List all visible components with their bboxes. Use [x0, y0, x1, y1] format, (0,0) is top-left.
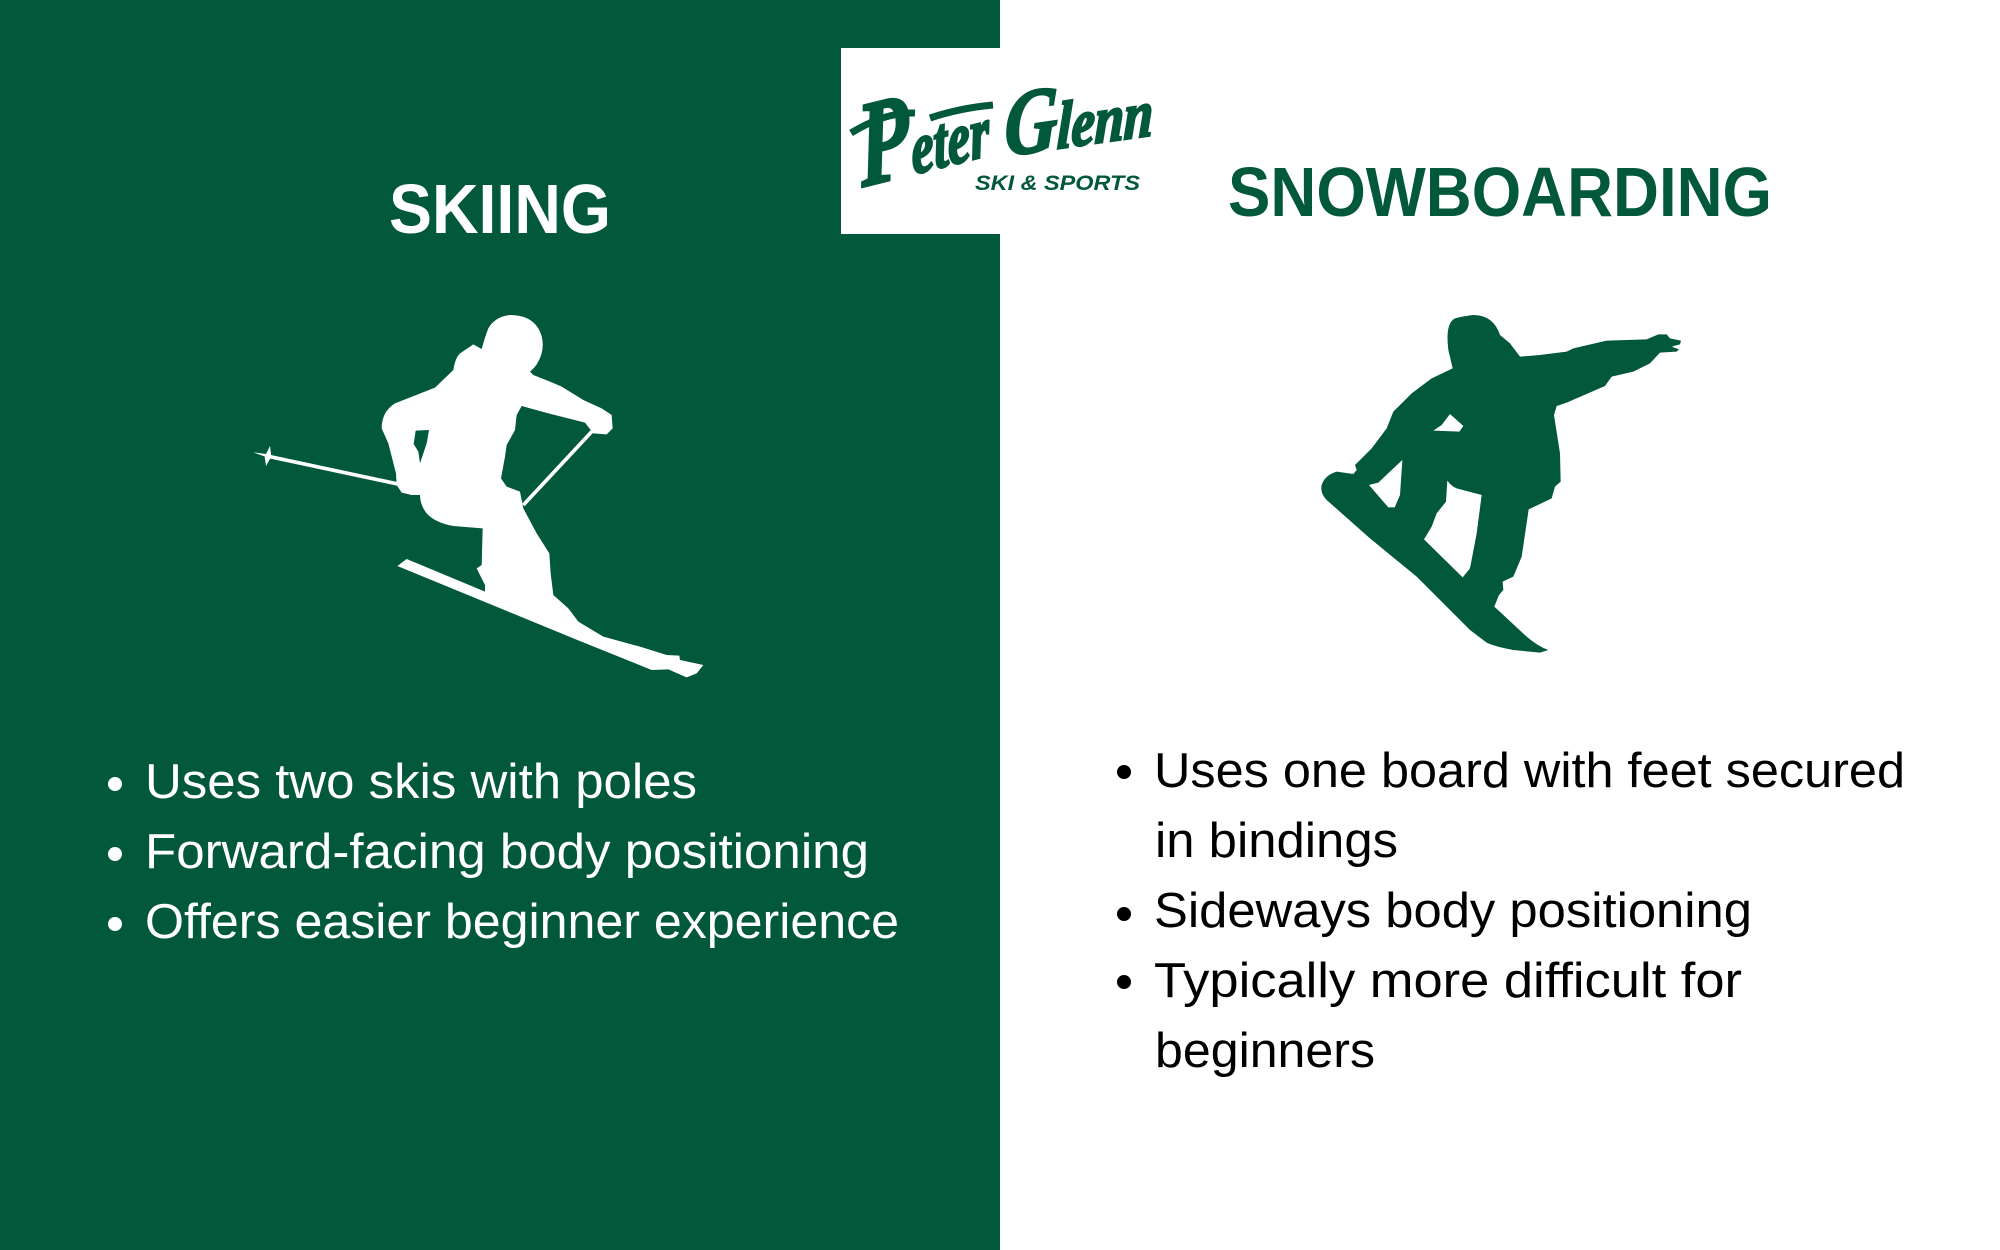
- bullet list: skiing: Forward-facing body positioning: [145, 825, 869, 879]
- logo wordmark: Glenn: Glenn: [1003, 53, 1155, 177]
- icon: snowboarder silhouette: [1321, 315, 1681, 653]
- icon: skier silhouette: [253, 315, 703, 677]
- panel: logo: [841, 47, 1155, 234]
- bullet list: snowboarding: Sideways body positioning: [1154, 884, 1752, 938]
- right ski pole: [523, 431, 592, 505]
- bullet list: skiing: [108, 755, 899, 949]
- heading: snowboarding: SNOWBOARDING: [1228, 153, 1772, 231]
- bullet list: skiing: Uses two skis with poles: [145, 755, 697, 809]
- bullet list: snowboarding: [1117, 744, 1905, 1078]
- left ski pole: [253, 446, 399, 484]
- bullet list: snowboarding: beginners: [1155, 1024, 1375, 1078]
- panel: snowboarding: [1117, 153, 1905, 1078]
- logo wordmark: Peter: Peter: [851, 47, 995, 214]
- bullet list: skiing: Offers easier beginner experience: [145, 895, 899, 949]
- logo tagline: SKI & SPORTS: [975, 172, 1140, 195]
- bullet list: snowboarding: Uses one board with feet secured: [1154, 744, 1905, 798]
- bullet list: snowboarding: in bindings: [1155, 814, 1398, 868]
- bullet list: snowboarding: Typically more difficult for: [1154, 954, 1742, 1008]
- panel: skiing: [0, 0, 1000, 1250]
- heading: skiing: SKIING: [389, 170, 611, 248]
